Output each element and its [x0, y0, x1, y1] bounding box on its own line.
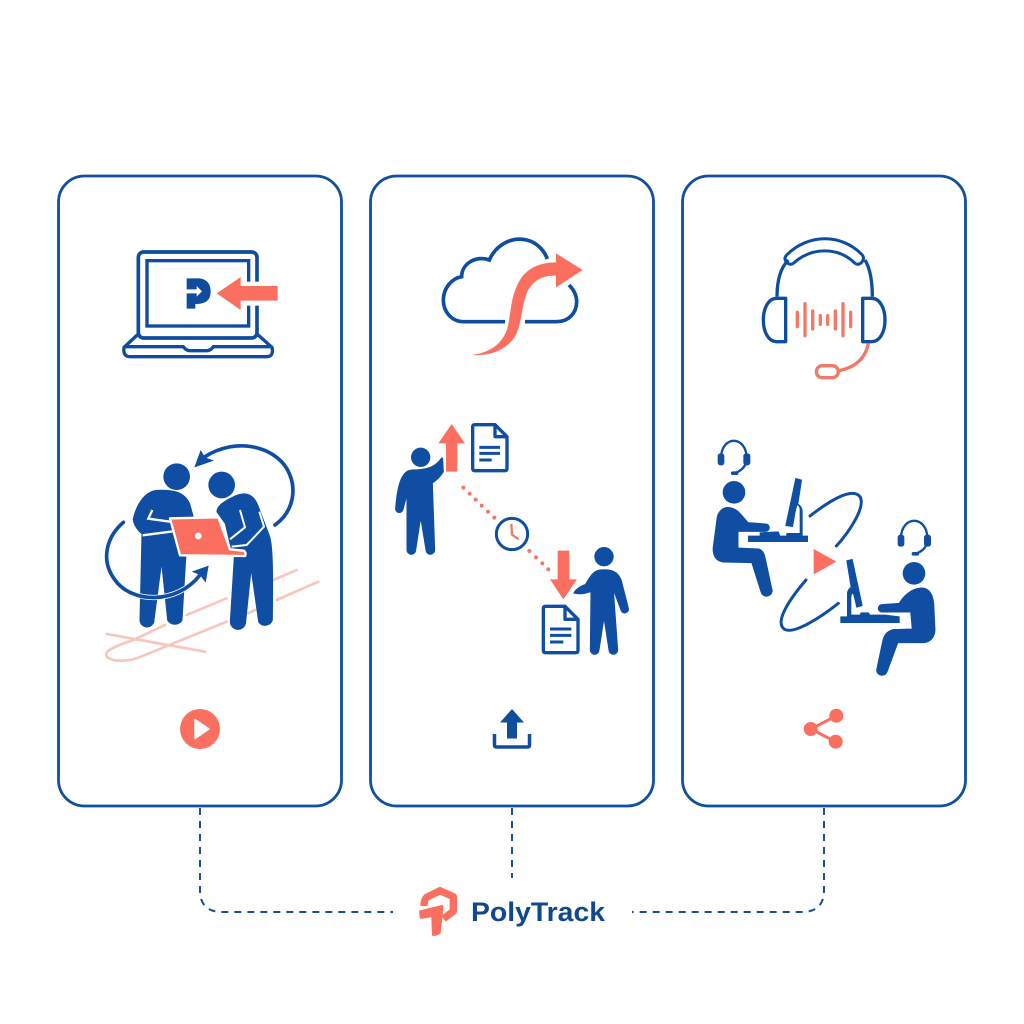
icon: laptop with incoming arrow: [124, 252, 278, 357]
icon: play button: [180, 709, 220, 749]
illustration: two call agents at desks: [714, 441, 934, 675]
logo mark: [419, 891, 453, 936]
icon: share: [804, 709, 843, 749]
illustration: two people sharing a laptop: [106, 446, 318, 661]
icon: headset with sound wave: [763, 239, 885, 378]
logo: PolyTrack: [419, 891, 606, 936]
icon: cloud with swoosh arrow: [443, 239, 583, 355]
icon: upload: [494, 709, 530, 747]
panel: middle: [370, 176, 654, 806]
panel: right: [682, 176, 966, 806]
illustration: two people with document upload and delay: [396, 424, 628, 654]
panel: left: [58, 176, 342, 806]
logo wordmark: PolyTrack: [471, 897, 606, 927]
dashed connectors to logo: [200, 808, 824, 912]
